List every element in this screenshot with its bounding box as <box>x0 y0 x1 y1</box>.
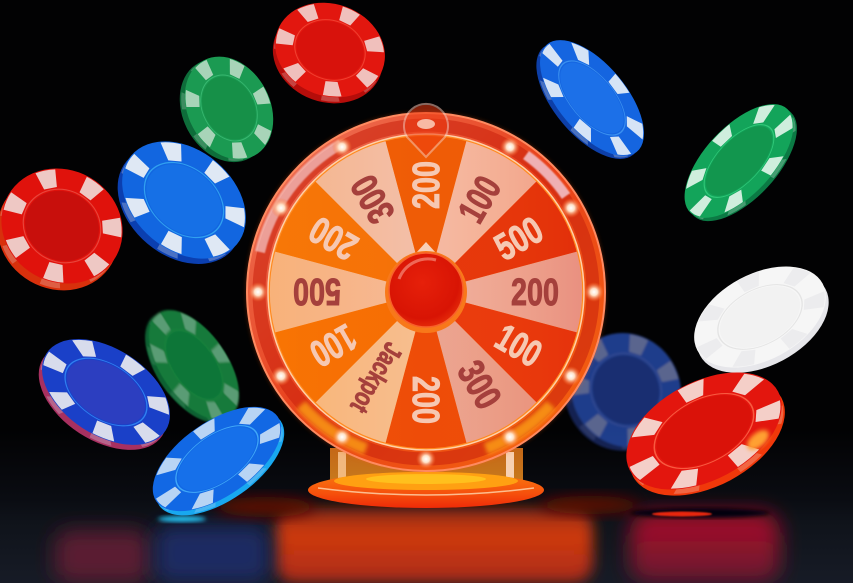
chip: green right <box>666 86 816 239</box>
pointer <box>404 104 448 157</box>
chip: red top <box>259 0 398 118</box>
chip: blue left <box>95 117 269 288</box>
label 100: 100 <box>488 317 549 376</box>
chip: blue bottom <box>135 386 302 536</box>
chip: red right bottom <box>607 348 804 520</box>
label 300: 300 <box>448 354 509 416</box>
wheel stand posts <box>330 448 523 490</box>
chip: blue top right <box>517 23 663 177</box>
wheel <box>246 104 606 472</box>
label 300 top: 300 <box>343 168 404 230</box>
wheel lights <box>248 137 604 469</box>
label 500 left: 500 <box>293 270 341 312</box>
hub arrow <box>416 242 436 253</box>
wheel base <box>308 472 544 508</box>
label 100 top: 100 <box>451 169 510 230</box>
chip: red left <box>0 147 144 312</box>
wheel segments <box>270 136 582 448</box>
chip highlight: orange glint on red chip <box>744 426 772 454</box>
wheel hub <box>385 251 467 333</box>
label 200 bottom: 200 <box>404 376 446 424</box>
label 200 left: 200 <box>303 207 365 268</box>
label 200 right: 200 <box>511 272 559 314</box>
chip: white right <box>677 246 846 394</box>
chip: blue lower left <box>20 317 189 472</box>
chip: dim blue behind wheel <box>544 313 702 471</box>
chip: green top <box>162 41 291 178</box>
label 100 left: 100 <box>302 315 363 374</box>
label Jackpot: Jackpot <box>345 337 408 418</box>
floor <box>0 430 853 583</box>
wheel outer ring <box>246 112 606 472</box>
label 500 right: 500 <box>488 209 550 270</box>
label 200 top: 200 <box>406 161 448 209</box>
chip: green lower left <box>127 294 257 438</box>
